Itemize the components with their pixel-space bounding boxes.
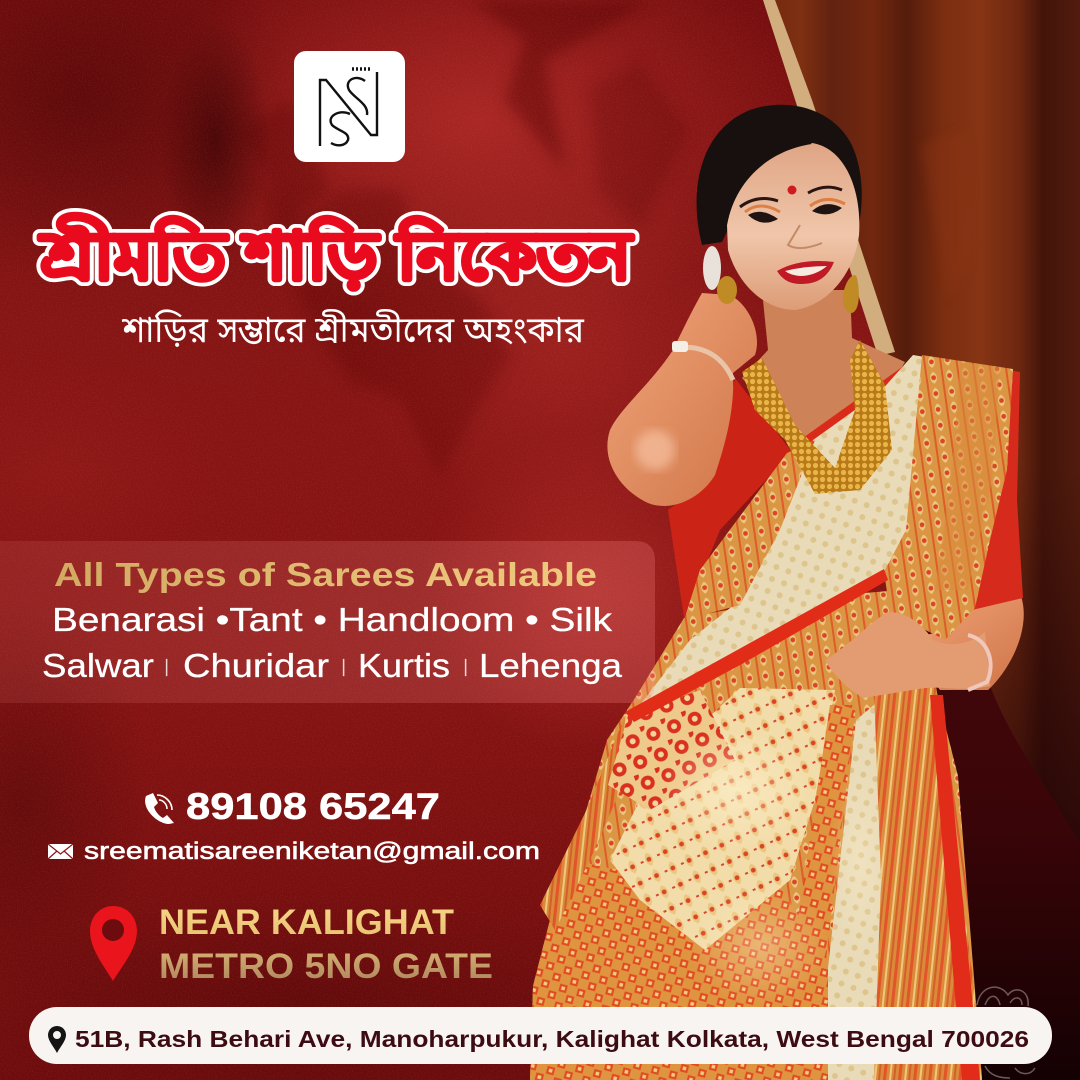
saree woven cream panel — [610, 688, 835, 950]
saree skirt lower weave — [530, 860, 828, 1080]
lips — [777, 261, 834, 284]
phone number: 89108 65247 — [186, 786, 440, 827]
curtain cream edge — [763, 0, 895, 356]
bindi — [788, 186, 796, 194]
neck and chest — [742, 290, 905, 445]
icon: envelope — [48, 844, 73, 859]
location: near kalighat: NEAR KALIGHAT — [159, 903, 454, 942]
raised arm and hand — [607, 293, 757, 506]
icon: location pin — [90, 906, 137, 981]
saree floral band — [608, 690, 735, 810]
heading: all types of sarees: All Types of Sarees Available — [54, 556, 597, 593]
address text: 51B, Rash Behari Ave, Manoharpukur, Kalighat Kolkata, West Bengal 700026 — [75, 1026, 1029, 1052]
saree diamond column — [790, 705, 856, 972]
left eye — [748, 212, 778, 223]
logo tile — [294, 51, 405, 162]
saree gold border right — [874, 685, 982, 1080]
logo mark — [320, 69, 377, 146]
saree skirt base — [530, 590, 982, 1080]
list: garment varieties: Lehenga — [479, 647, 623, 684]
right bangle — [968, 635, 991, 690]
right eye — [812, 204, 842, 214]
location: metro gate: METRO 5NO GATE — [159, 947, 493, 986]
nose shadow — [788, 225, 822, 248]
list: garment varieties — [42, 647, 623, 684]
title: শ্রীমতি শাড়ি নিকেতন — [39, 213, 634, 293]
earrings — [843, 275, 859, 313]
right hand over saree — [825, 612, 990, 698]
blouse — [668, 378, 792, 618]
saree red stripe — [625, 569, 888, 722]
curtain — [770, 0, 1080, 845]
address bar — [29, 1007, 1052, 1064]
list: garment varieties: Kurtis — [358, 647, 450, 684]
list: saree varieties: Benarasi •Tant • Handloom • Silk — [52, 601, 613, 638]
saree cream chest panel — [640, 355, 925, 705]
face — [727, 143, 859, 310]
email: sreematisareeniketan@gmail.com — [84, 838, 540, 865]
necklace — [742, 340, 892, 494]
sheen on saree — [660, 730, 890, 1005]
background: dark backdrop behind figure — [900, 560, 1080, 1080]
saree gold shoulder band — [684, 440, 815, 620]
white flower — [703, 246, 721, 290]
icon: address pin — [48, 1026, 66, 1053]
tagline: শাড়ির সম্ভারে শ্রীমতীদের অহংকার — [121, 308, 584, 350]
list: garment varieties: Salwar — [42, 647, 154, 684]
title: শ্রীমতি শাড়ি নিকেতন — [39, 213, 634, 293]
decorative ornament bottom right — [977, 987, 1035, 1078]
woman figure — [530, 105, 1024, 1080]
brows — [740, 187, 842, 207]
left bangle — [675, 347, 733, 380]
icon: phone — [145, 793, 174, 824]
saree pleat column — [828, 690, 892, 1080]
right arm — [900, 596, 1024, 690]
list: garment varieties: Churidar — [183, 647, 329, 684]
hair — [697, 105, 862, 245]
eye shadow — [745, 199, 845, 212]
saree border ribbons — [540, 716, 650, 930]
hairline — [727, 136, 812, 225]
panel: saree types — [0, 541, 655, 703]
saree pallu gold — [884, 355, 1013, 640]
